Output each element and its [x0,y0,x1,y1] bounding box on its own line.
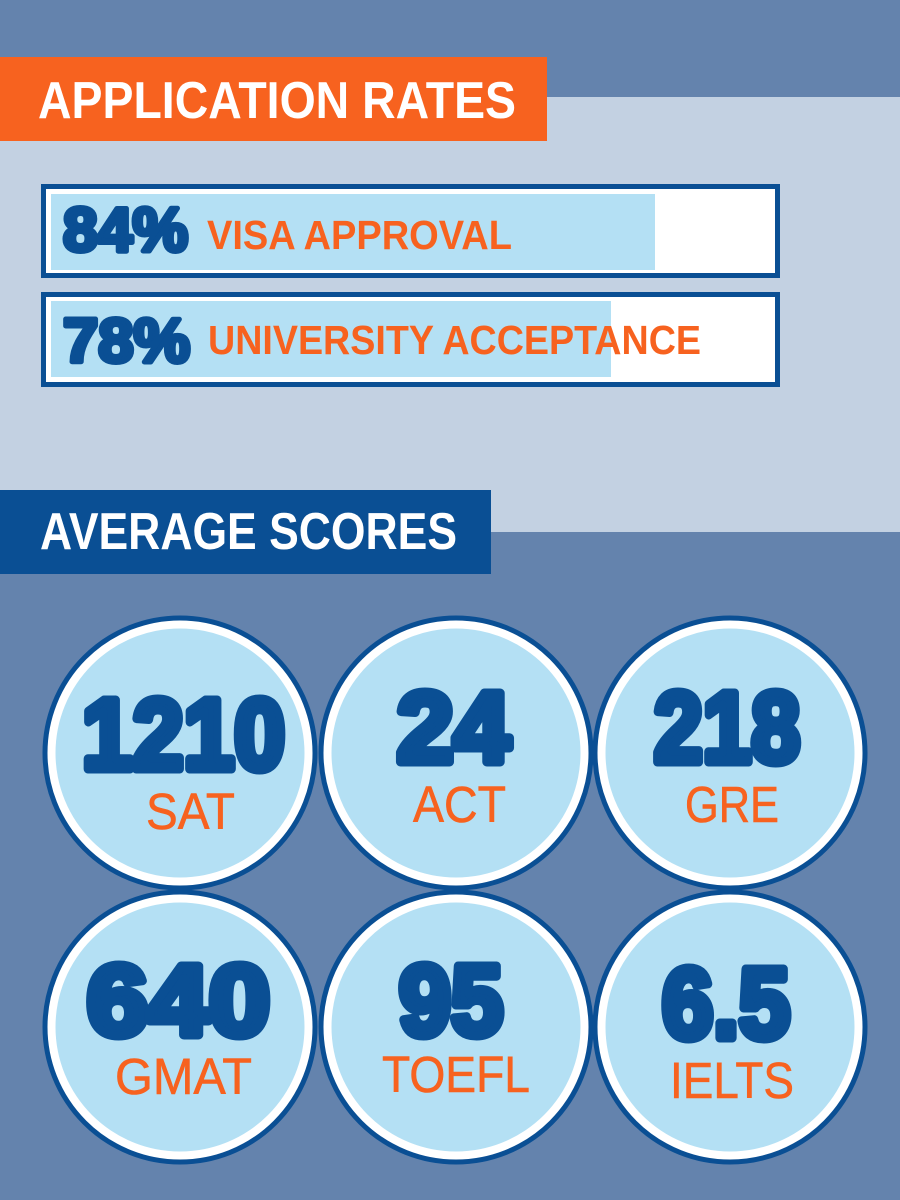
score circle: IELTS 6.5: 6.5 [662,948,790,1060]
score circle: GRE 218: GRE [685,776,779,833]
bar: university acceptance 78% [44,294,778,384]
heading: average scores [0,490,491,574]
score circle: GRE 218 [595,618,865,888]
score circle: IELTS 6.5 [595,892,865,1162]
score circle: ACT 24 [321,618,591,888]
score circle: IELTS 6.5: IELTS [670,1052,794,1109]
bar: visa approval 84% [44,186,778,276]
score circle: GMAT 640: 640 [87,945,270,1057]
score circle: TOEFL 95: 95 [399,945,503,1057]
score circle: SAT 1210: 1210 [82,679,285,791]
score circle: SAT 1210 [45,618,315,888]
bar: university acceptance 78%: 78% [63,307,190,376]
score circle: GMAT 640 [45,892,315,1162]
heading: application rates: APPLICATION RATES [38,72,516,130]
heading: average scores: AVERAGE SCORES [40,503,457,561]
score circle: GMAT 640: GMAT [115,1048,252,1105]
panel: application rates background [0,97,900,532]
score circle: SAT 1210: SAT [146,783,235,840]
score circle: ACT 24: ACT [413,776,506,833]
score circle: TOEFL 95: TOEFL [382,1046,530,1103]
bar: university acceptance 78%: UNIVERSITY ACCEPTANCE [208,317,701,363]
score circle: GRE 218: 218 [654,672,800,784]
bar: visa approval 84%: 84% [63,196,188,265]
score circle: TOEFL 95 [321,892,591,1162]
score circle: ACT 24: 24 [397,672,510,784]
heading: application rates [0,57,547,141]
bar: visa approval 84%: VISA APPROVAL [207,212,512,258]
